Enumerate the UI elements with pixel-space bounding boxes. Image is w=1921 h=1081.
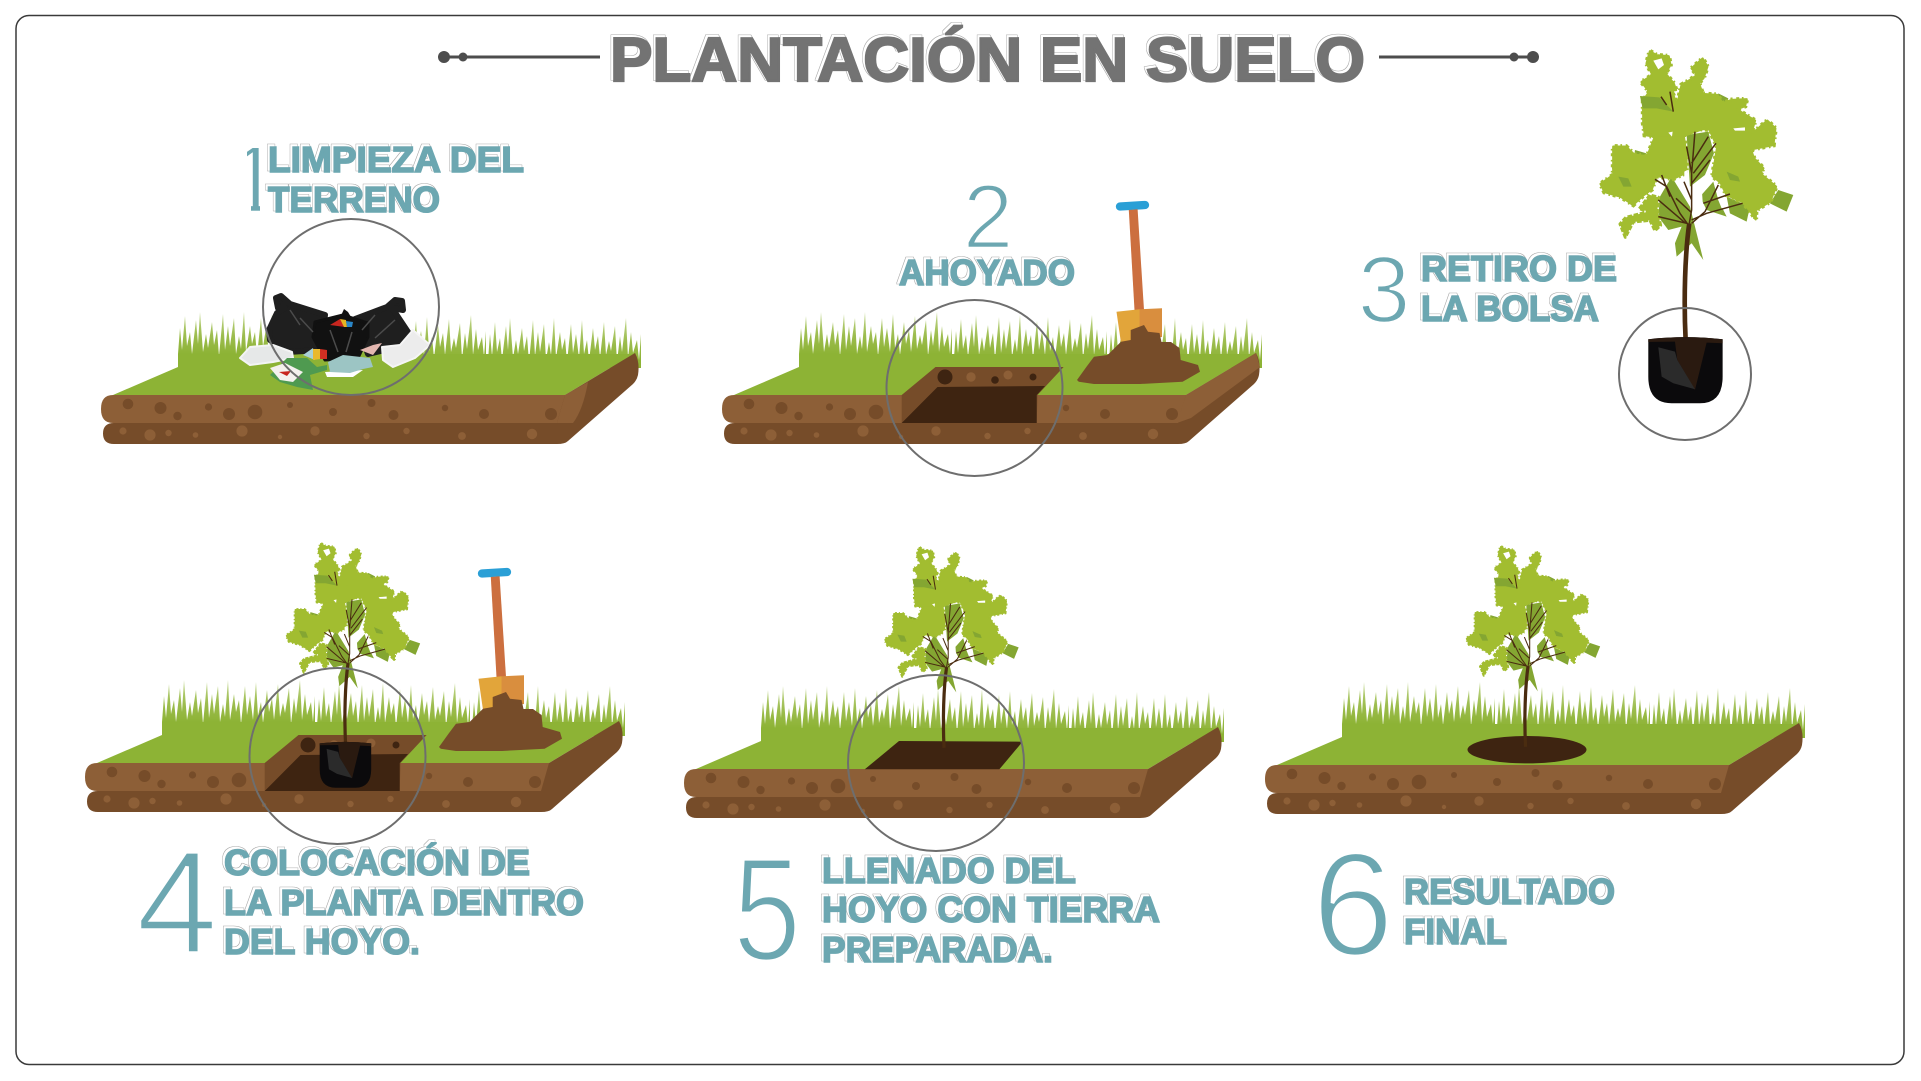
step 3 number: 3 [1358, 237, 1410, 343]
title right ornament [1379, 51, 1539, 63]
step 4 shovel and soil mound [439, 572, 562, 751]
step 4 label: DEL HOYO. [224, 921, 420, 962]
step 2 number: 2 [963, 167, 1013, 268]
step 6 soil ring [1468, 736, 1586, 763]
step 1 label: TERRENO [268, 179, 440, 220]
step 1 focus circle [263, 219, 439, 395]
step 4 label: LA PLANTA DENTRO [224, 882, 584, 923]
step 2 shovel and soil mound [1077, 205, 1200, 384]
step 3 label: RETIRO DE [1421, 248, 1617, 289]
step 6: resultado final [1265, 547, 1805, 987]
step 3 focus circle [1619, 308, 1751, 440]
step 1: limpieza del terreno [101, 127, 641, 444]
step 5 label [822, 850, 1160, 970]
step 5 ground [684, 686, 1224, 818]
step 4 number: 4 [136, 821, 218, 985]
step 4 hole [265, 735, 427, 791]
step 6 tree [1467, 547, 1600, 747]
step 3 label [1421, 248, 1617, 329]
step 3 tree in bag [1601, 51, 1793, 403]
step 4: colocacion de la planta [85, 544, 625, 985]
step 1 number: 1 [228, 127, 280, 233]
step 2 ground [722, 312, 1262, 444]
step 5 label: LLENADO DEL [822, 850, 1076, 891]
step 4 tree in bag [287, 544, 420, 788]
step 4 focus circle [250, 668, 426, 844]
step 1 label [268, 139, 524, 220]
step 2 hole [902, 367, 1064, 423]
step 5: llenado del hoyo [684, 548, 1224, 992]
step 5 focus circle [848, 675, 1024, 851]
title [438, 26, 1539, 95]
step 3 label: LA BOLSA [1421, 288, 1599, 329]
step 5 label: HOYO CON TIERRA [822, 889, 1160, 930]
step 4 label [224, 841, 584, 962]
step 2: ahoyado [722, 167, 1262, 476]
step 2 label: AHOYADO [899, 252, 1075, 293]
step 6 label [1404, 871, 1615, 952]
trash pile with black bags [240, 296, 430, 390]
step 4 ground [85, 680, 625, 812]
step 3: retiro de la bolsa [1358, 51, 1793, 440]
step 4 label: COLOCACIÓN DE [224, 841, 530, 883]
step 6 number: 6 [1312, 823, 1394, 987]
step 1 label: LIMPIEZA DEL [268, 139, 524, 180]
step 1 ground [101, 312, 641, 444]
step 6 ground [1265, 682, 1805, 814]
step 6 label: RESULTADO [1404, 871, 1615, 912]
step 5 filled hole [865, 741, 1022, 769]
step 6 label: FINAL [1404, 911, 1507, 952]
title text: PLANTACIÓN EN SUELO [610, 26, 1365, 95]
title left ornament [438, 51, 600, 63]
step 5 label: PREPARADA. [822, 929, 1053, 970]
step 5 number: 5 [733, 827, 801, 992]
step 5 tree [885, 548, 1019, 748]
step 2 focus circle [886, 300, 1062, 476]
